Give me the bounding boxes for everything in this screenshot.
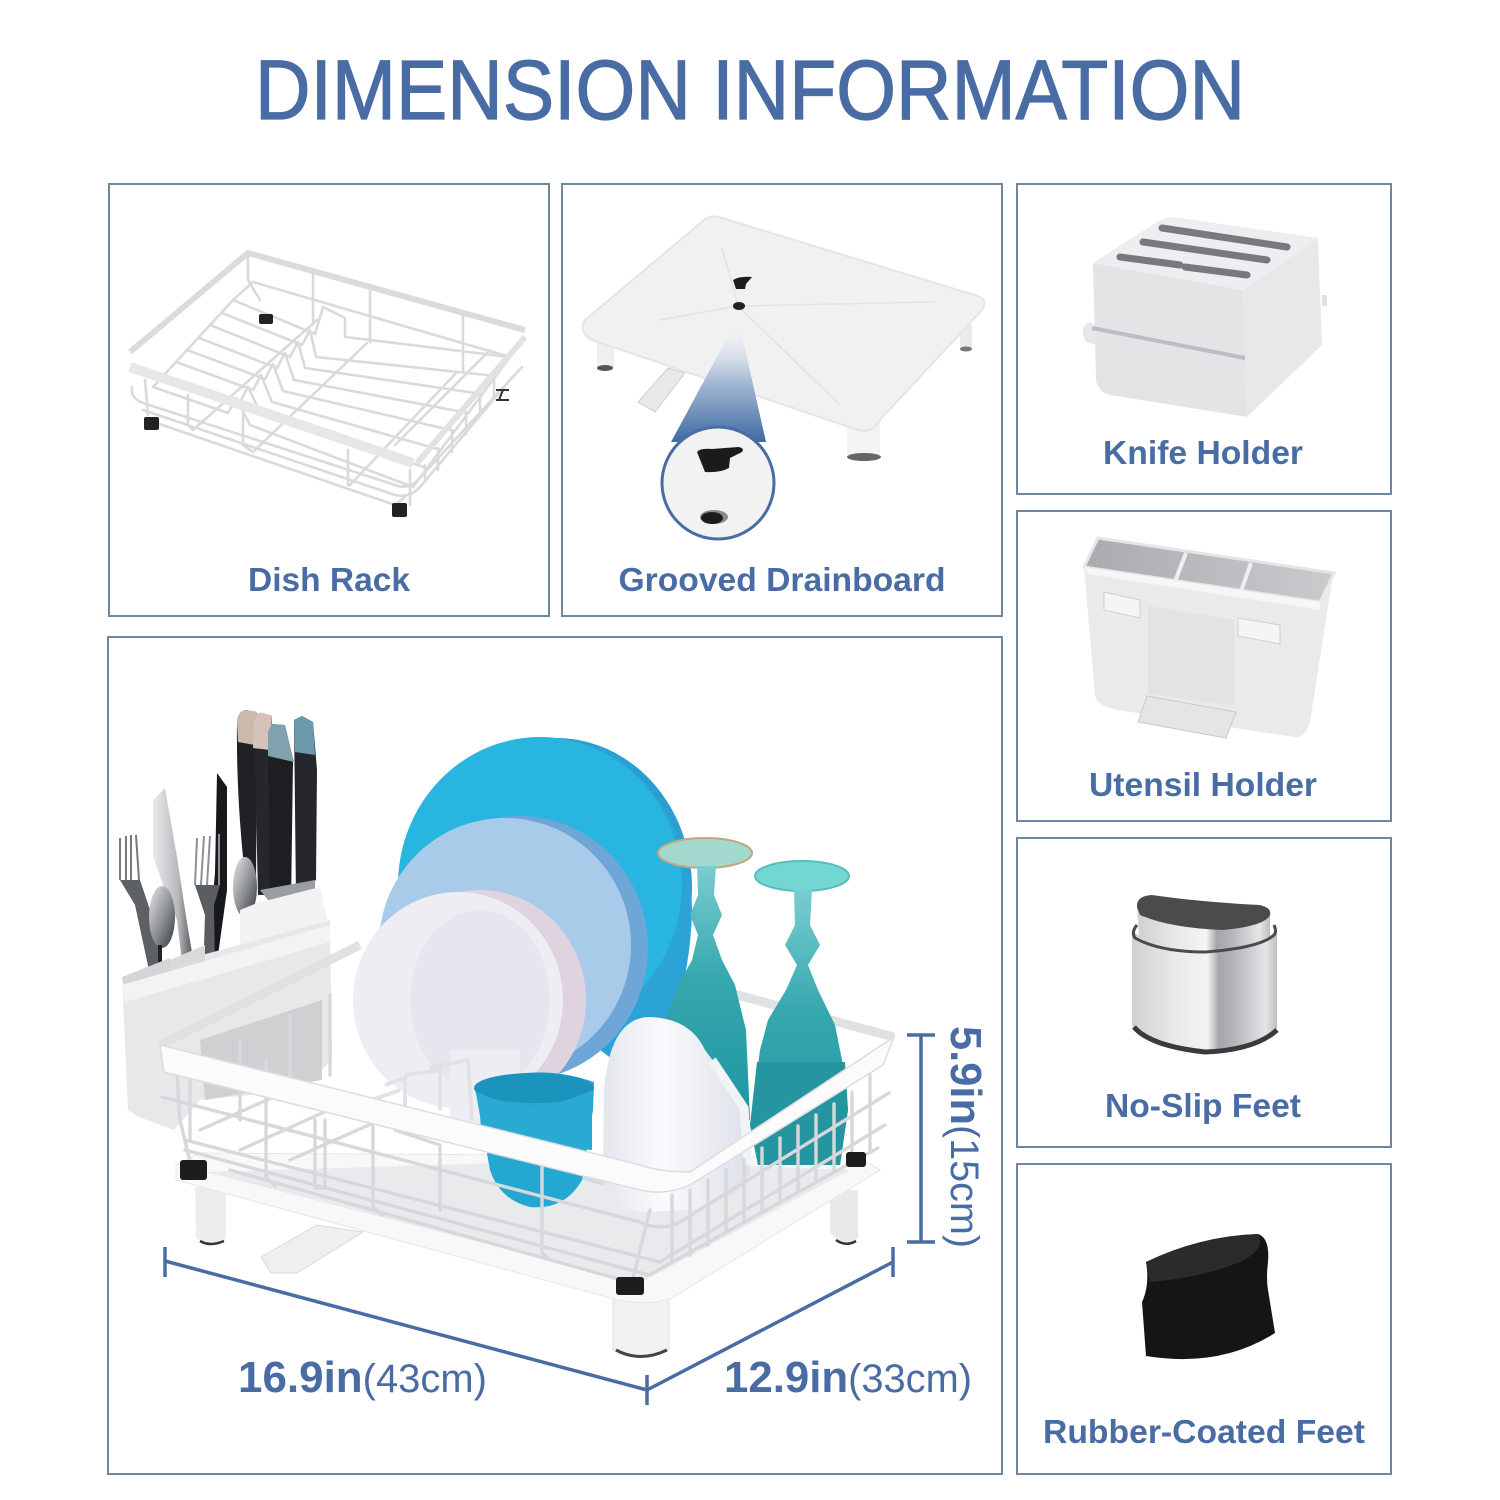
label: utensil holder: Utensil Holder: [1089, 766, 1317, 803]
illustration: dish dividers: [372, 1060, 472, 1130]
label: rubber-coated feet: Rubber-Coated Feet: [1043, 1413, 1365, 1450]
panel: no-slip feet: [1017, 838, 1391, 1147]
icon: no-slip foot: [1132, 895, 1277, 1052]
label: no-slip feet: No-Slip Feet: [1105, 1087, 1301, 1124]
icon: knife holder: [1083, 217, 1327, 417]
label: knife holder: Knife Holder: [1103, 434, 1303, 471]
panel: knife holder: [1017, 184, 1391, 494]
icon: drainboard: [583, 216, 984, 539]
label: height: 5.9in (15cm): [941, 1026, 990, 1248]
label: depth: 12.9in(33cm): [724, 1353, 972, 1402]
dimension: width line: [165, 1247, 647, 1405]
dimension: height line: [907, 1035, 935, 1242]
illustration: mugs: [474, 1017, 750, 1212]
illustration: blue plates: [353, 737, 692, 1130]
panel: utensil holder: [1017, 511, 1391, 821]
illustration: utensil holder attached: [122, 887, 332, 1130]
label: grooved drainboard: Grooved Drainboard: [618, 561, 946, 598]
illustration: floor wires: [190, 995, 660, 1200]
label: dish rack: Dish Rack: [248, 561, 411, 598]
panel: grooved drainboard: [562, 184, 1002, 616]
panel: rubber-coated feet: [1017, 1164, 1391, 1474]
panel: dish rack: [109, 184, 549, 616]
illustration: wire rack front: [160, 1037, 894, 1295]
icon: utensil holder: [1084, 538, 1334, 738]
illustration: wine glasses: [658, 838, 849, 1165]
label: width: 16.9in(43cm): [238, 1353, 487, 1402]
illustration: drain tray and legs: [176, 1153, 880, 1358]
dimension: depth line: [647, 1247, 893, 1390]
illustration: back of wire rack: [160, 945, 894, 1045]
icon: dish rack wire basket: [130, 253, 525, 517]
panel: main product: [108, 637, 1002, 1474]
icon: rubber foot: [1142, 1234, 1275, 1359]
title: DIMENSION INFORMATION: [255, 43, 1245, 137]
illustration: cutlery: [120, 710, 317, 985]
